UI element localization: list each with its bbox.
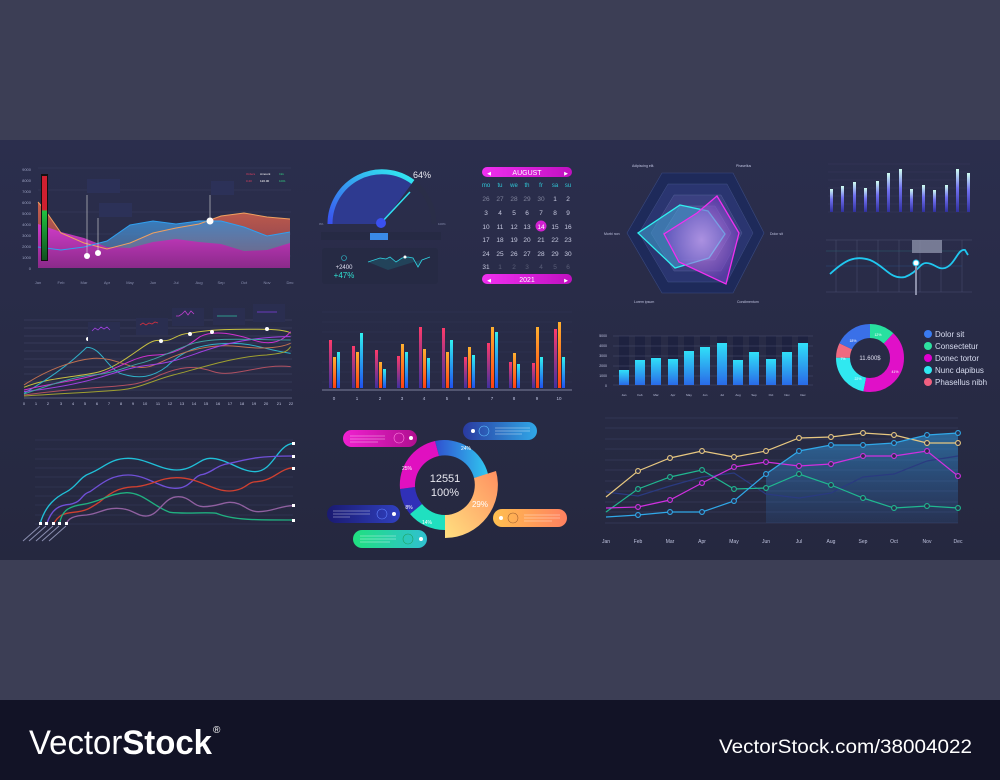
chart: area chart: Jan xyxy=(35,280,41,285)
legend: Donec tortor xyxy=(935,354,979,363)
bar chart: grouped: 2 xyxy=(379,396,382,401)
legend: Phasellus nibh xyxy=(935,378,987,387)
calendar xyxy=(482,167,572,284)
bar chart: grouped: 1 xyxy=(356,396,359,401)
line chart: monthly lines: Apr xyxy=(698,539,706,545)
footer xyxy=(0,700,1000,780)
line chart: multi lines: 17 xyxy=(228,401,233,406)
line chart: multi lines: 10 xyxy=(143,401,148,406)
calendar: ▶ xyxy=(564,171,568,177)
panel: gauge stats xyxy=(322,248,438,284)
donut chart: small: 11.600$ xyxy=(859,356,881,362)
bar chart: monthly blue: Dec xyxy=(800,393,806,397)
calendar: 2 xyxy=(566,196,570,203)
calendar: 10 xyxy=(482,224,490,231)
calendar: 6 xyxy=(525,210,529,217)
calendar: 3 xyxy=(484,210,488,217)
panel: gauge stats: +47% xyxy=(334,271,354,280)
calendar: 23 xyxy=(564,237,572,244)
line chart: multi lines: 18 xyxy=(240,401,245,406)
line chart: monthly lines xyxy=(602,418,963,545)
line chart: monthly lines: Sep xyxy=(859,539,868,545)
line chart: multi lines: 16 xyxy=(216,401,221,406)
line chart: wave xyxy=(826,240,972,295)
donut chart: big xyxy=(400,440,498,538)
calendar: fr xyxy=(539,183,543,189)
radar chart: Lorem ipsum xyxy=(634,300,654,304)
calendar: 1 xyxy=(553,196,557,203)
calendar: 2021 xyxy=(519,277,535,284)
legend: Dolor sit xyxy=(935,330,965,339)
bar chart: monthly blue: Nov xyxy=(784,393,790,397)
calendar: 17 xyxy=(482,237,490,244)
chart: area chart: 0 xyxy=(29,266,32,271)
callout: blue xyxy=(463,422,537,440)
calendar: th xyxy=(524,183,530,189)
bar chart: monthly blue: Mar xyxy=(653,393,659,397)
bar chart: grouped: 10 xyxy=(556,396,562,401)
line chart: monthly lines: Jul xyxy=(796,539,802,545)
calendar: 27 xyxy=(496,196,504,203)
bar chart: grouped: 0 xyxy=(333,396,336,401)
chart: area chart: Dec xyxy=(286,280,294,285)
line chart: multi lines: 9 xyxy=(132,401,135,406)
line chart: multi lines: 1 xyxy=(35,401,38,406)
donut chart: small: 12% xyxy=(874,333,882,337)
line chart: multi lines: 2 xyxy=(47,401,50,406)
bar chart: monthly blue xyxy=(599,334,813,397)
line chart: monthly lines: Oct xyxy=(890,539,898,545)
calendar: 27 xyxy=(523,251,531,258)
chart: area chart: Aug xyxy=(195,280,203,285)
radar chart: Phasellus xyxy=(736,164,751,168)
calendar: 26 xyxy=(510,251,518,258)
line chart: smooth lines xyxy=(23,440,295,541)
calendar: su xyxy=(565,183,571,189)
calendar: 15 xyxy=(551,224,559,231)
calendar: 14 xyxy=(537,224,545,231)
calendar: 29 xyxy=(551,251,559,258)
calendar: 22 xyxy=(551,237,559,244)
bar chart: monthly blue: Jul xyxy=(720,393,724,397)
calendar: 28 xyxy=(510,196,518,203)
bar chart: monthly blue: Jun xyxy=(703,393,708,397)
calendar: 29 xyxy=(523,196,531,203)
bar chart: grouped: 5 xyxy=(446,396,449,401)
bar chart: grouped: 3 xyxy=(401,396,404,401)
line chart: monthly lines: Nov xyxy=(923,539,932,545)
bar chart: monthly blue: Jan xyxy=(622,393,627,397)
bar chart: monthly blue: 4000 xyxy=(599,344,607,348)
radar chart: Dolor sit xyxy=(770,232,783,236)
bar chart: grouped: 9 xyxy=(536,396,539,401)
bar chart: monthly blue: Sep xyxy=(751,393,757,397)
donut chart: small xyxy=(840,331,899,385)
donut chart: small: 41% xyxy=(891,370,899,374)
chart: area chart: Feb xyxy=(58,280,65,285)
calendar: 30 xyxy=(537,196,545,203)
donut chart: small: 7% xyxy=(840,357,846,361)
line chart: monthly lines: Jun xyxy=(762,539,770,545)
gauge: 64% xyxy=(413,170,431,180)
chart: area chart: May xyxy=(126,280,134,285)
line chart: multi lines: 7 xyxy=(108,401,111,406)
callout: navy xyxy=(327,505,400,523)
chart: area chart: 1001 xyxy=(279,179,286,183)
bar chart: grouped xyxy=(322,312,572,401)
chart: area chart: 120.00 xyxy=(260,179,270,183)
donut chart: big: 29% xyxy=(472,500,488,509)
chart: area chart: Jun xyxy=(150,280,156,285)
footer: ® xyxy=(213,725,221,736)
bar chart: monthly blue: 1000 xyxy=(599,374,607,378)
bar chart: monthly blue: 5000 xyxy=(599,334,607,338)
legend: Consectetur xyxy=(935,342,978,351)
chart: area chart: 7000 xyxy=(22,189,32,194)
bar chart: grouped: 7 xyxy=(491,396,494,401)
chart: area chart: 3000 xyxy=(22,233,32,238)
donut chart: big: 25% xyxy=(402,466,413,472)
calendar: 5 xyxy=(512,210,516,217)
line chart: monthly lines: Dec xyxy=(954,539,963,545)
calendar: 8 xyxy=(553,210,557,217)
chart: area chart xyxy=(22,167,294,285)
calendar: 4 xyxy=(498,210,502,217)
donut chart: big: 100% xyxy=(431,487,459,499)
calendar: 16 xyxy=(564,224,572,231)
chart: area chart: Jul xyxy=(173,280,179,285)
chart: area chart: 8000 xyxy=(22,178,32,183)
line chart: multi lines: 22 xyxy=(289,401,294,406)
chart: area chart: 6000 xyxy=(22,200,32,205)
calendar: 30 xyxy=(564,251,572,258)
chart: area chart: 2000 xyxy=(22,244,32,249)
legend: Nunc dapibus xyxy=(935,366,984,375)
bar chart: grouped: 8 xyxy=(513,396,516,401)
donut chart: big: 24% xyxy=(461,446,472,452)
bar chart: monthly blue: May xyxy=(686,393,692,397)
calendar: 2 xyxy=(512,264,516,271)
callout: orange xyxy=(493,509,567,527)
calendar: 11 xyxy=(497,224,504,231)
radar chart xyxy=(604,164,783,304)
calendar: 31 xyxy=(482,264,490,271)
radar chart: Morbi non xyxy=(604,232,620,236)
chart: area chart: Nov xyxy=(263,280,271,285)
chart: area chart: 5000 xyxy=(22,211,32,216)
line chart: multi lines: 3 xyxy=(60,401,63,406)
line chart: multi lines: 4 xyxy=(72,401,75,406)
line chart: multi lines: 14 xyxy=(192,401,197,406)
calendar: 5 xyxy=(553,264,557,271)
bar chart: monthly blue: 2000 xyxy=(599,364,607,368)
calendar: 13 xyxy=(523,224,531,231)
chart: area chart: Amount xyxy=(260,172,271,176)
calendar: 25 xyxy=(496,251,504,258)
line chart: multi lines: 12 xyxy=(168,401,173,406)
calendar: 9 xyxy=(566,210,570,217)
calendar: 20 xyxy=(523,237,531,244)
calendar: 21 xyxy=(537,237,545,244)
bar chart: top right xyxy=(828,164,970,212)
chart: area chart: Apr xyxy=(104,280,111,285)
calendar: 12 xyxy=(510,224,518,231)
calendar: ◀ xyxy=(487,278,491,284)
line chart: multi lines: 19 xyxy=(252,401,257,406)
line chart: multi lines: 15 xyxy=(204,401,209,406)
bar chart: monthly blue: 0 xyxy=(605,384,607,388)
chart: area chart: 1000 xyxy=(22,255,32,260)
donut chart: big: 8% xyxy=(405,505,413,511)
calendar: ▶ xyxy=(564,278,568,284)
callout: magenta xyxy=(343,430,417,447)
line chart: multi lines: 5 xyxy=(84,401,87,406)
radar chart: Condimentum xyxy=(737,300,759,304)
chart: area chart: Orders xyxy=(246,172,256,176)
calendar: 19 xyxy=(510,237,518,244)
line chart: monthly lines: May xyxy=(729,539,739,545)
line chart: multi lines: 11 xyxy=(156,401,161,406)
calendar: ◀ xyxy=(487,171,491,177)
line chart: multi lines: 8 xyxy=(120,401,123,406)
bar chart: monthly blue: Aug xyxy=(735,393,741,397)
bar chart: monthly blue: Oct xyxy=(769,393,773,397)
line chart: monthly lines: Jan xyxy=(602,539,610,545)
line chart: monthly lines: Feb xyxy=(634,539,643,545)
legend xyxy=(924,330,987,387)
chart: area chart: Mar xyxy=(81,280,88,285)
chart: area chart: 4000 xyxy=(22,222,32,227)
chart: area chart: Info xyxy=(279,172,284,176)
chart: area chart: Oct xyxy=(241,280,248,285)
gauge xyxy=(319,170,446,240)
calendar: 24 xyxy=(482,251,490,258)
donut chart: big: 12551 xyxy=(430,473,460,485)
url: VectorStock.com/38004022 xyxy=(719,737,972,758)
bar chart: monthly blue: Apr xyxy=(671,393,675,397)
calendar: 6 xyxy=(566,264,570,271)
donut chart: small: 18% xyxy=(849,339,857,343)
line chart: multi lines: 13 xyxy=(180,401,185,406)
calendar: 26 xyxy=(482,196,490,203)
calendar: AUGUST xyxy=(512,170,542,177)
radar chart: Adipiscing elit. xyxy=(632,164,654,168)
dashboard panel xyxy=(0,140,1000,560)
calendar: mo xyxy=(482,183,491,189)
line chart: multi lines: 20 xyxy=(264,401,269,406)
bar chart: monthly blue: 3000 xyxy=(599,354,607,358)
donut chart: small: 22% xyxy=(854,377,862,381)
chart: area chart: 0.20 xyxy=(246,179,252,183)
bar chart: monthly blue: Feb xyxy=(637,393,643,397)
panel: gauge stats: +2400 xyxy=(336,265,353,271)
gauge: 100% xyxy=(438,222,446,226)
calendar: 18 xyxy=(496,237,504,244)
callout: green xyxy=(353,530,427,548)
calendar: 28 xyxy=(537,251,545,258)
calendar: 7 xyxy=(539,210,543,217)
logo: VectorStock xyxy=(29,724,212,762)
donut chart: big: 14% xyxy=(422,520,433,526)
line chart: multi lines: 6 xyxy=(96,401,99,406)
line chart: multi lines: 21 xyxy=(277,401,282,406)
bar chart: grouped: 4 xyxy=(423,396,426,401)
line chart: monthly lines: Mar xyxy=(666,539,675,545)
chart: area chart: Sep xyxy=(217,280,225,285)
calendar: 4 xyxy=(539,264,543,271)
calendar: sa xyxy=(552,183,559,189)
calendar: we xyxy=(509,183,518,189)
bar chart: grouped: 6 xyxy=(468,396,471,401)
chart: area chart: 9000 xyxy=(22,167,32,172)
calendar: 1 xyxy=(498,264,502,271)
line chart: multi lines xyxy=(23,304,294,406)
line chart: monthly lines: Aug xyxy=(827,539,836,545)
gauge: 0% xyxy=(319,222,324,226)
calendar: 3 xyxy=(525,264,529,271)
line chart: multi lines: 0 xyxy=(23,401,26,406)
calendar: tu xyxy=(497,183,503,189)
